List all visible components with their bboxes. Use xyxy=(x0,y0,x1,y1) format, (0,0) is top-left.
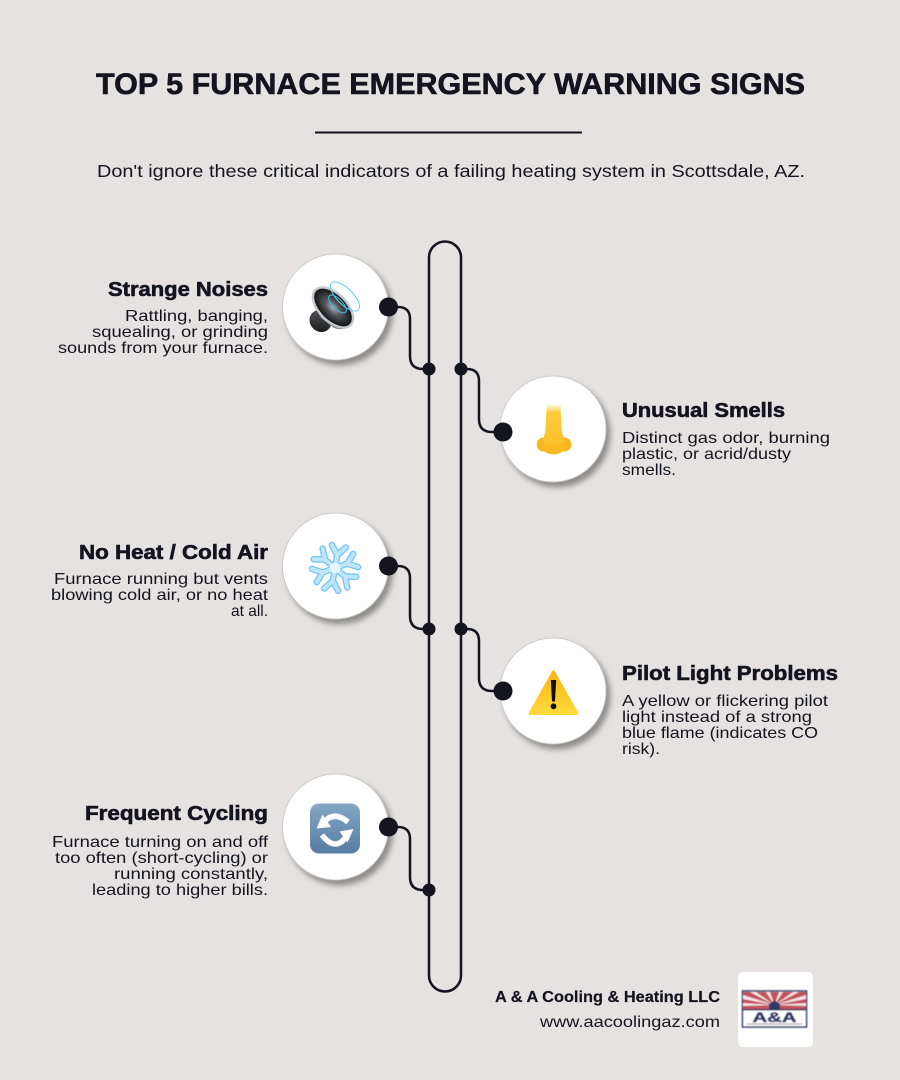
text: pilot light description: risk). xyxy=(622,741,660,758)
heading: no heat: No Heat / Cold Air xyxy=(79,542,268,564)
text: strange noises description: squealing, or grinding xyxy=(92,324,268,341)
text: frequent cycling description: leading to higher bills. xyxy=(92,882,268,899)
heading: pilot light: Pilot Light Problems xyxy=(622,663,838,685)
text: no heat description xyxy=(51,571,269,620)
text: frequent cycling description: running constantly, xyxy=(114,866,268,883)
icon circle: warning xyxy=(500,638,606,744)
text: no heat description: blowing cold air, or no heat xyxy=(51,587,269,604)
heading: strange noises: Strange Noises xyxy=(108,279,268,301)
panel: no heat / cold air xyxy=(51,513,436,636)
text: unusual smells description: plastic, or acrid/dusty xyxy=(622,446,791,463)
connector: unusual smells xyxy=(454,362,512,442)
connector: pilot light xyxy=(454,622,512,700)
text: frequent cycling description: Furnace turning on and off xyxy=(52,834,269,851)
text: unusual smells description: Distinct gas odor, burning xyxy=(622,430,830,447)
text: no heat description: at all. xyxy=(231,603,268,620)
panel: strange noises xyxy=(58,254,436,376)
connector: strange noises xyxy=(379,298,436,376)
icon circle: snowflake xyxy=(282,513,388,619)
text: frequent cycling description: too often (short-cycling) or xyxy=(55,850,269,867)
panel: unusual smells xyxy=(454,362,830,482)
text: strange noises description xyxy=(58,308,268,357)
connector: frequent cycling xyxy=(379,818,436,896)
footer: website: www.aacoolingaz.com xyxy=(539,1014,720,1031)
footer: company name: A & A Cooling & Heating LLC xyxy=(495,989,720,1006)
heading: unusual smells: Unusual Smells xyxy=(622,400,785,422)
icon circle: cycle arrows xyxy=(282,774,388,880)
text: strange noises description: Rattling, banging, xyxy=(125,308,268,325)
icon circle: nose xyxy=(500,376,606,482)
text: pilot light description: A yellow or flickering pilot xyxy=(622,693,829,710)
panel: pilot light problems xyxy=(454,622,838,758)
text: pilot light description: light instead of a strong xyxy=(622,709,812,726)
text: no heat description: Furnace running but vents xyxy=(54,571,268,588)
text: unusual smells description xyxy=(622,430,830,479)
heading: frequent cycling: Frequent Cycling xyxy=(85,803,268,825)
logo xyxy=(738,972,813,1047)
connector: no heat xyxy=(379,556,436,636)
subtitle: Don't ignore these critical indicators of a failing heating system in Scottsdale, AZ. xyxy=(97,161,805,181)
text: pilot light description xyxy=(622,693,829,758)
text: strange noises description: sounds from your furnace. xyxy=(58,340,268,357)
text: unusual smells description: smells. xyxy=(622,462,676,479)
text: frequent cycling description xyxy=(52,834,269,899)
logo: A&A xyxy=(752,1009,796,1025)
title: TOP 5 FURNACE EMERGENCY WARNING SIGNS xyxy=(96,68,805,101)
panel: frequent cycling xyxy=(52,774,436,899)
central timeline track xyxy=(429,242,461,992)
text: pilot light description: blue flame (indicates CO xyxy=(622,725,818,742)
icon circle: speaker xyxy=(282,254,388,360)
